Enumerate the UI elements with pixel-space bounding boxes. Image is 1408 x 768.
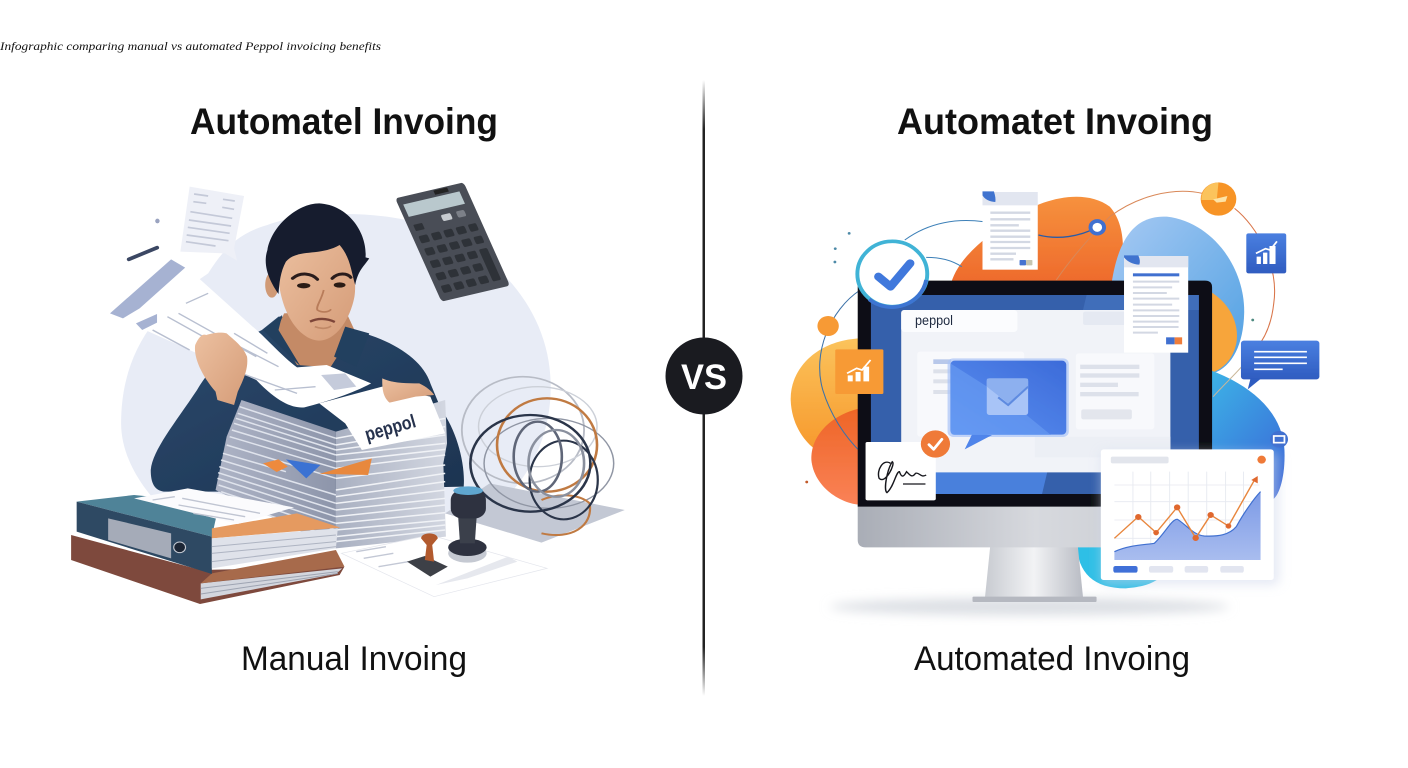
- held invoice sheet: [108, 258, 371, 407]
- orange check badge: [921, 430, 950, 458]
- left orange blob: [811, 408, 864, 505]
- center divider line: [702, 80, 705, 696]
- collar: [263, 315, 369, 367]
- left yellow blob: [791, 338, 866, 448]
- pie icon: [1201, 182, 1236, 216]
- eyebrows, eyes, nose, mouth: [293, 274, 351, 328]
- monitor body: [858, 281, 1212, 602]
- connector lines: [820, 191, 1275, 453]
- monitor shadow: [830, 598, 1229, 615]
- alt text caption: Infographic comparing manual vs automated Peppol invoicing benefits: [0, 41, 382, 53]
- small dots: [805, 232, 1254, 483]
- tangled wires: [462, 377, 614, 535]
- check badge: [857, 241, 927, 307]
- speech bubble tile: [1241, 341, 1319, 389]
- face: [279, 233, 355, 341]
- automated invoicing illustration: [791, 182, 1319, 615]
- calculator: [395, 182, 510, 302]
- network node: [1091, 221, 1104, 234]
- blue chart tile: [1246, 233, 1286, 273]
- wooden stamp: [407, 533, 448, 577]
- bottom paper: [341, 535, 547, 597]
- grey sheet under wires: [445, 483, 625, 543]
- bottom cyan blob: [1077, 537, 1169, 588]
- lower-right cyan blob: [1172, 370, 1285, 500]
- right orange blob: [1204, 288, 1237, 373]
- right hand: [382, 378, 434, 403]
- signature card: [866, 442, 936, 500]
- paper stack: [216, 400, 447, 548]
- peppol label on screen: peppol: [915, 312, 953, 328]
- neck: [277, 310, 354, 367]
- hair: [266, 203, 369, 294]
- right caption: Automated Invoing: [914, 640, 1190, 678]
- orange dot node: [817, 316, 839, 336]
- VS badge: VS: [681, 358, 727, 397]
- black stamp: [448, 486, 487, 563]
- paper on binder: [134, 488, 294, 524]
- floating paper: [180, 187, 244, 261]
- lower brown binder: [71, 535, 344, 604]
- invoice document 2: [1124, 255, 1188, 353]
- peppol label on paper: peppol: [363, 411, 418, 446]
- right sheet: [319, 387, 445, 450]
- left heading: Automatel Invoing: [190, 101, 498, 142]
- pale background circle: [121, 214, 551, 517]
- pen: [129, 248, 157, 259]
- ear: [265, 272, 279, 298]
- app window: [901, 310, 1170, 472]
- invoice document 1: [982, 191, 1038, 270]
- right heading: Automatet Invoing: [897, 101, 1213, 142]
- shirt: [151, 317, 464, 492]
- top-right blue blob: [1112, 217, 1244, 373]
- left caption: Manual Invoing: [241, 640, 467, 678]
- left hand: [195, 333, 247, 405]
- top orange blob: [951, 197, 1123, 283]
- email message bubble: [948, 358, 1069, 449]
- small blue icon: [1270, 431, 1288, 448]
- upper teal binder: [77, 495, 340, 574]
- orange and blue tabs: [263, 458, 372, 478]
- orange chart tile: [835, 349, 883, 394]
- manual invoicing illustration: [71, 182, 625, 604]
- VS badge: [666, 338, 742, 414]
- line chart card: [1101, 449, 1279, 585]
- small dot: [155, 219, 160, 223]
